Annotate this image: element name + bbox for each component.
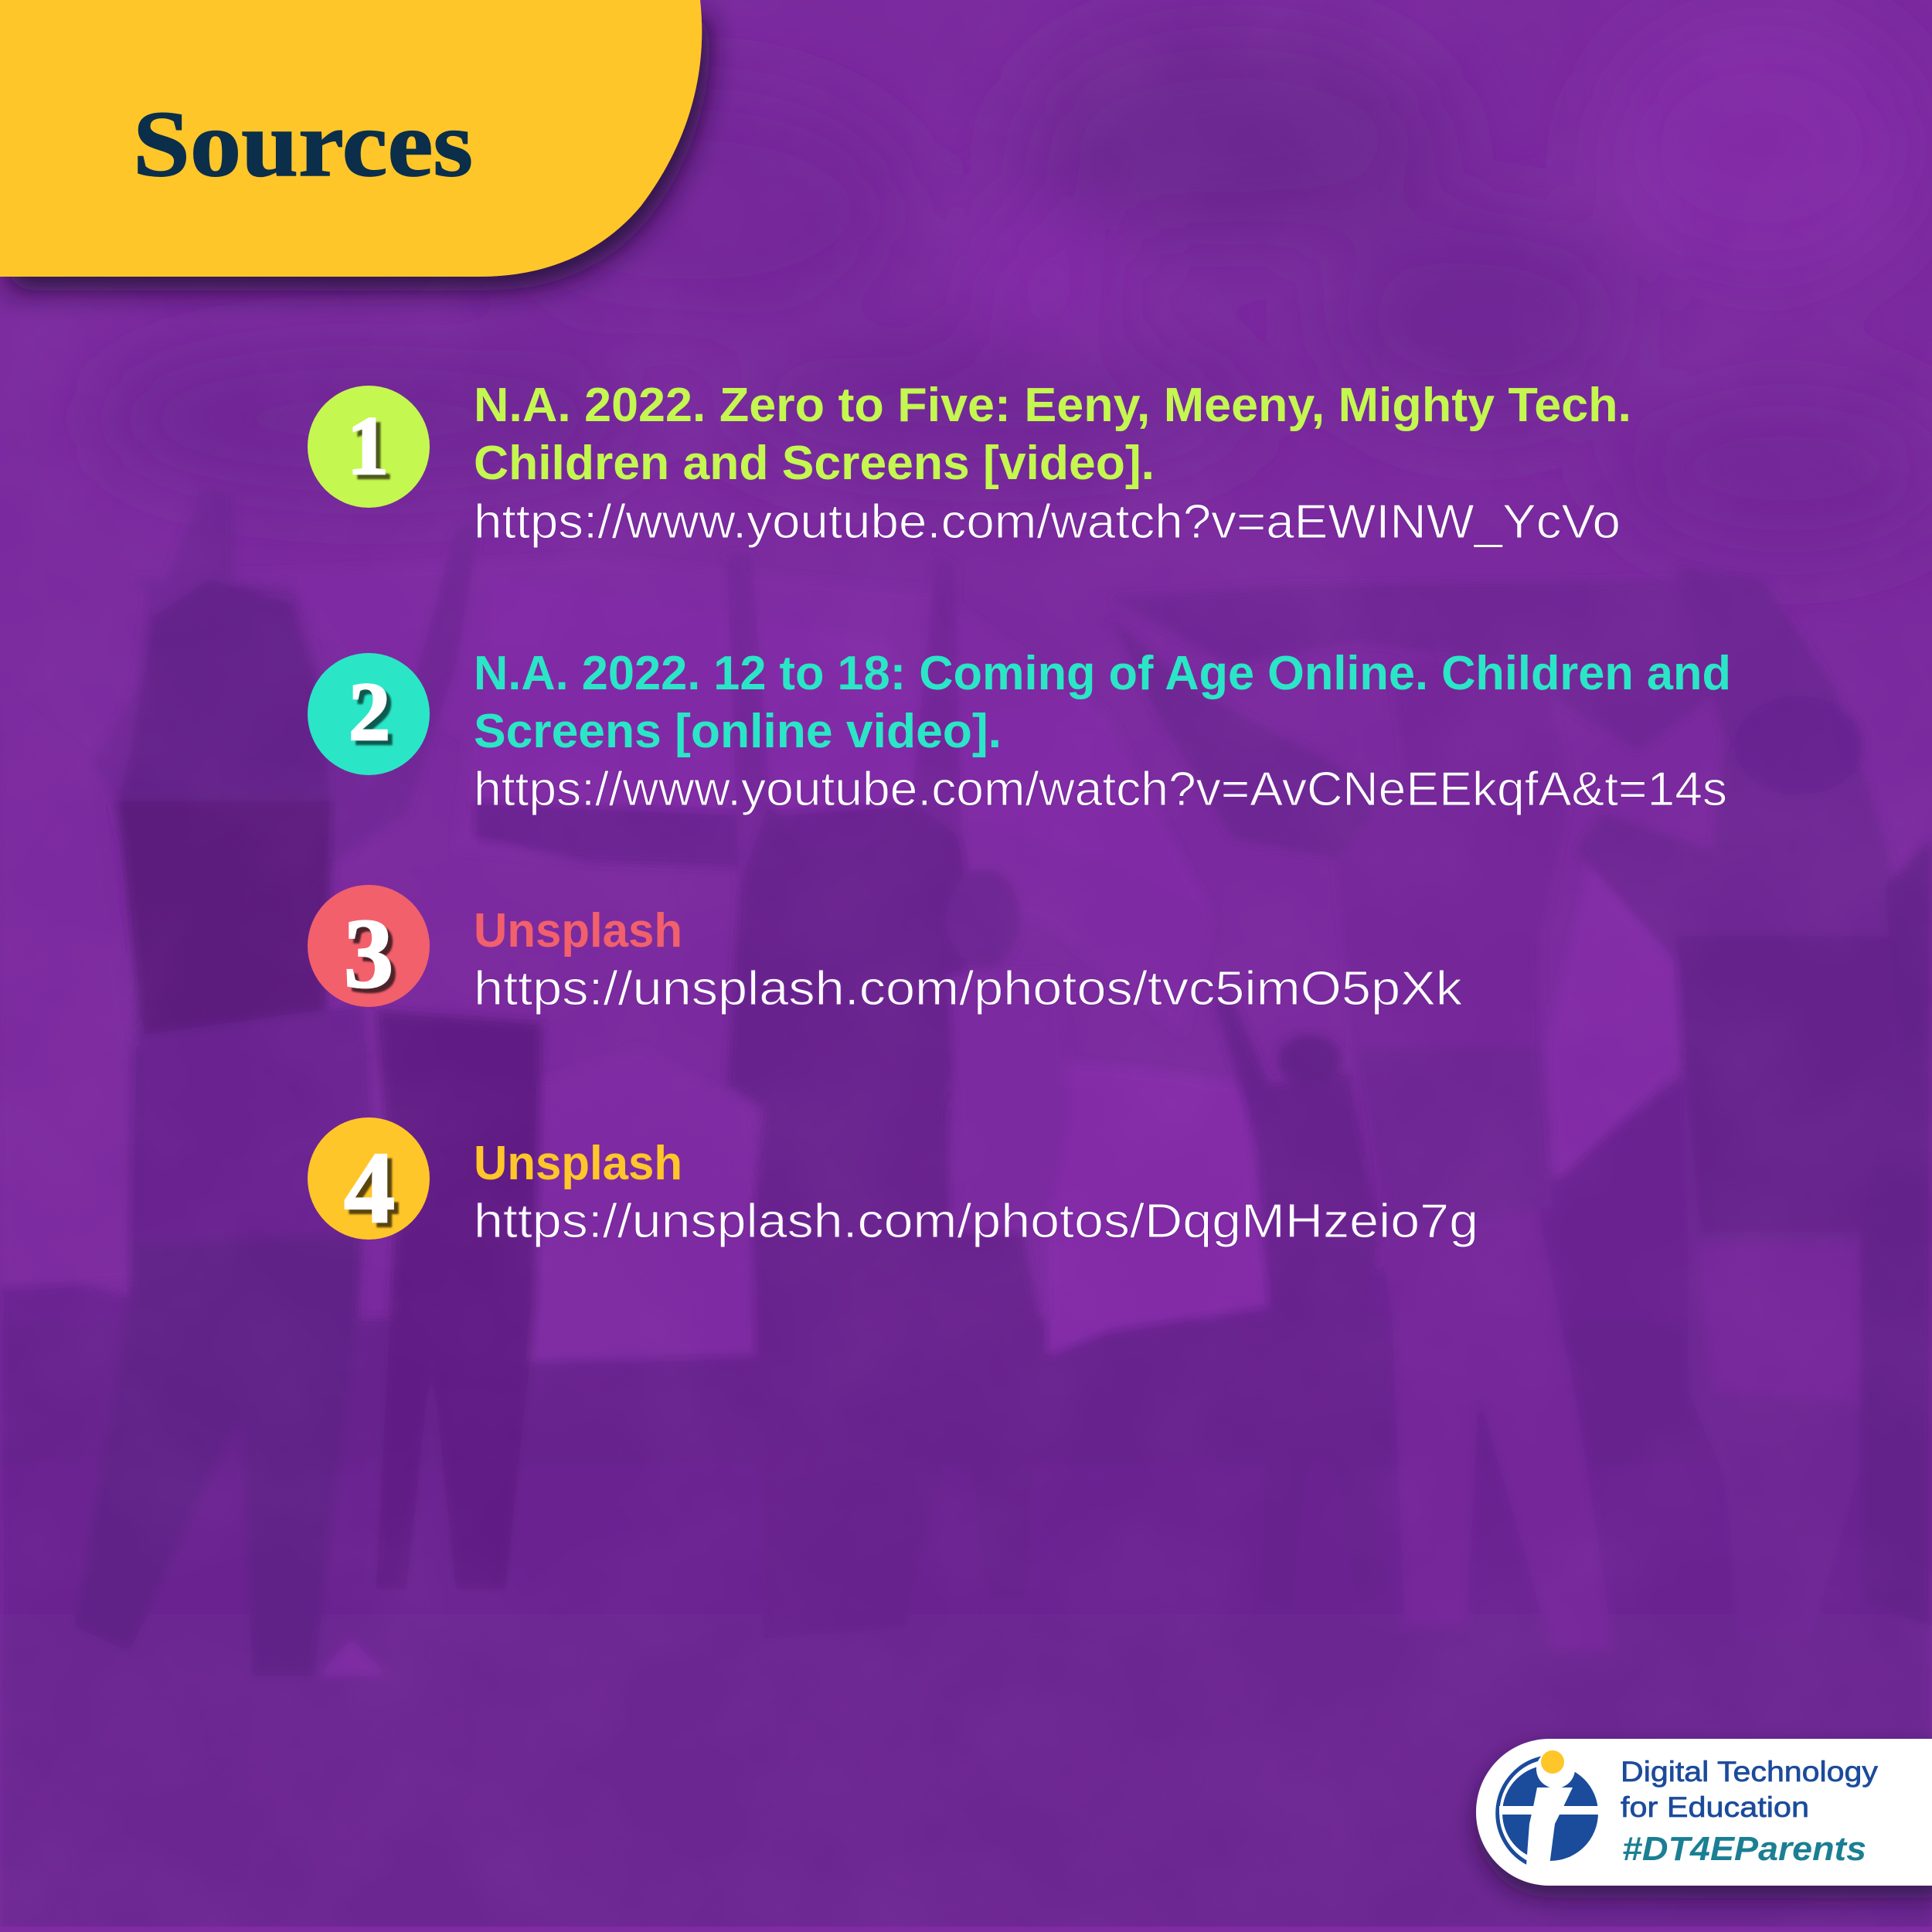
- sheet highlights and shadow: [129, 557, 1213, 1035]
- person 3 centre: [727, 554, 1041, 1639]
- source 2 url: https://www.youtube.com/watch?v=AvCNeEEkqfA&t=14s: [474, 763, 1727, 816]
- person right centre: [1337, 653, 1614, 1651]
- title: Sources: [133, 92, 473, 196]
- icon: number 4 badge: [308, 1117, 430, 1244]
- icon: Digital Technology for Education logo: [1498, 1750, 1601, 1866]
- icon: number 3 badge: 3: [344, 899, 393, 1009]
- person right: [1577, 566, 1910, 1639]
- source 1 citation: Children and Screens [video].: [474, 437, 1155, 490]
- icon: number 3 badge: [308, 885, 430, 1009]
- source 4 citation: Unsplash: [474, 1137, 682, 1190]
- person 1 left: [74, 487, 481, 1675]
- person 2 behind: [376, 1010, 543, 1590]
- bright sky gaps: [530, 1047, 764, 1362]
- source 2 citation: [474, 647, 1731, 758]
- source 4 url: https://unsplash.com/photos/DqgMHzeio7g: [474, 1195, 1478, 1248]
- source 4: [308, 1117, 1478, 1248]
- source 1: [308, 379, 1631, 549]
- source 1 citation: [474, 379, 1631, 490]
- source 2: [308, 647, 1731, 816]
- icon: number 1 badge: [308, 386, 430, 508]
- source 1 url: https://www.youtube.com/watch?v=aEWINW_YcVo: [474, 495, 1621, 549]
- logo text: [1621, 1756, 1879, 1868]
- icon: number 2 badge: 2: [349, 666, 390, 758]
- header panel: yellow tab: [0, 0, 702, 277]
- icon: number 2 badge: [308, 653, 430, 775]
- logo text: for Education: [1621, 1791, 1809, 1823]
- source 3 citation: Unsplash: [474, 904, 682, 957]
- source 2 citation: Screens [online video].: [474, 705, 1002, 758]
- source 2 citation: N.A. 2022. 12 to 18: Coming of Age Online. Children and: [474, 647, 1731, 700]
- tree line and field: [0, 1072, 1932, 1627]
- logo text: #DT4EParents: [1622, 1830, 1866, 1868]
- far right figure: [1861, 838, 1932, 1627]
- source 3 url: https://unsplash.com/photos/tvc5imO5pXk: [474, 962, 1463, 1015]
- child right: [1213, 998, 1393, 1614]
- child centre: [946, 869, 1020, 968]
- source 1 citation: N.A. 2022. Zero to Five: Eeny, Meeny, Mighty Tech.: [474, 379, 1631, 432]
- logo panel: [1476, 1739, 1932, 1886]
- icon: number 4 badge: 4: [344, 1131, 395, 1244]
- icon: number 1 badge: 1: [347, 400, 389, 492]
- source 3: [308, 885, 1463, 1015]
- logo text: Digital Technology: [1621, 1756, 1879, 1787]
